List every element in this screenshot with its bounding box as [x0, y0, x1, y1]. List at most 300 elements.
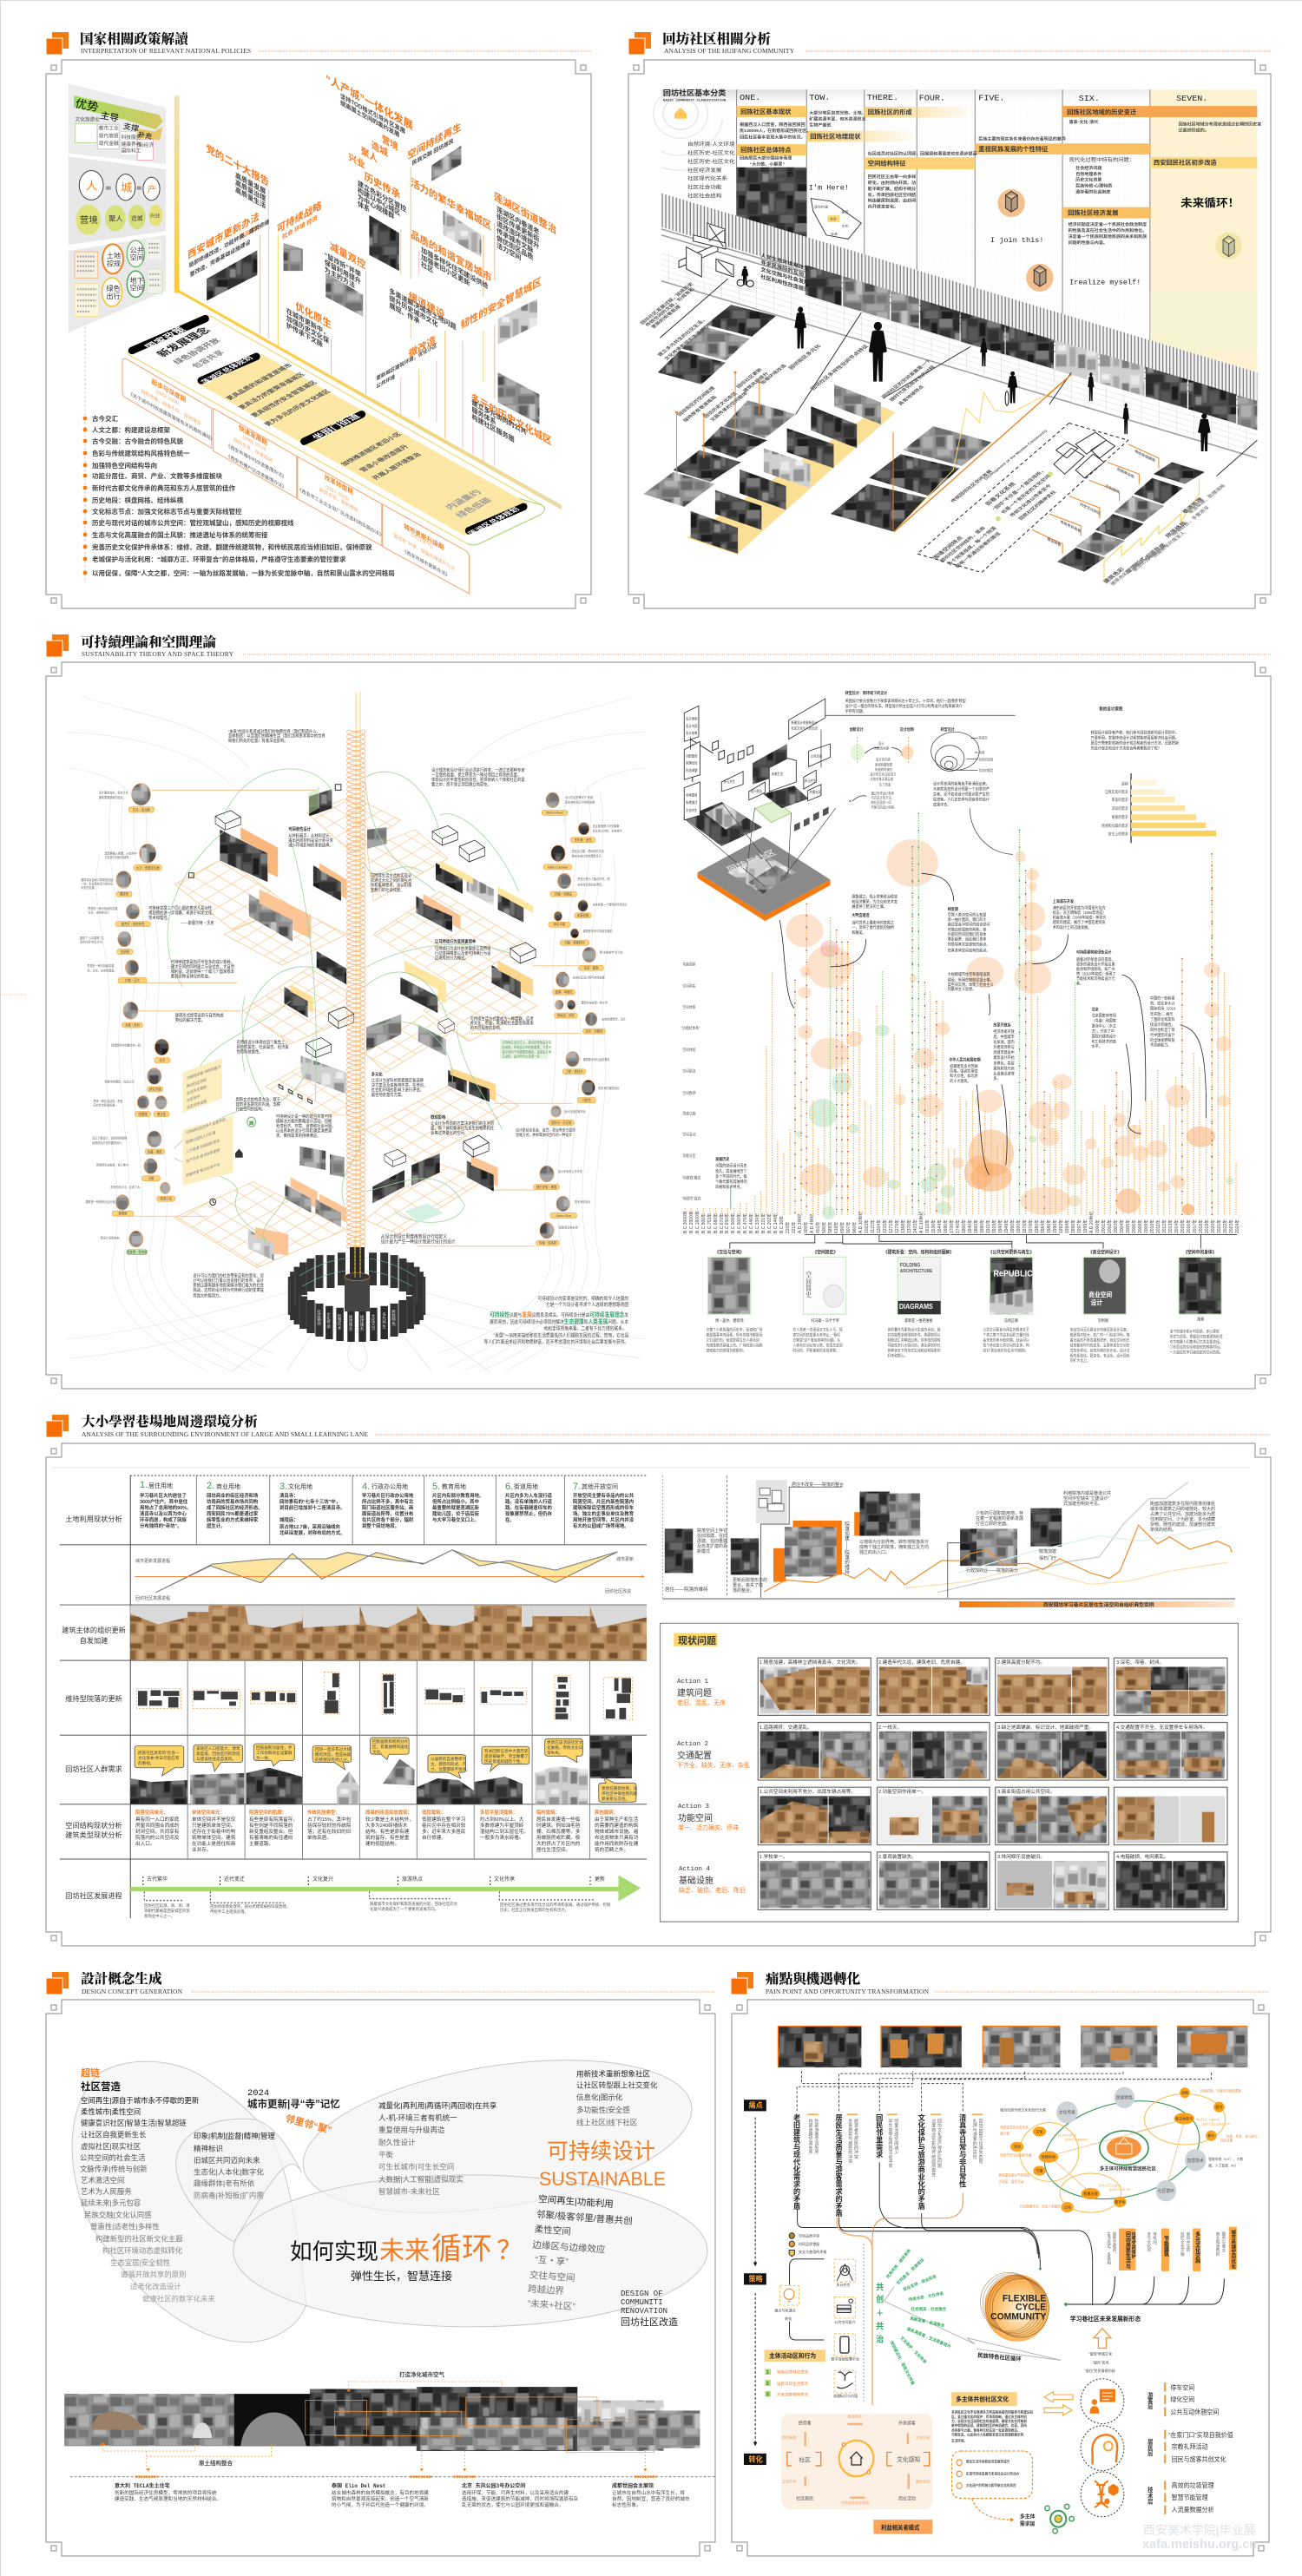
speech bubble text: 回坊一直没有过大规 [315, 1746, 352, 1752]
problems headings: 现状问题 [678, 1634, 716, 1646]
case study captions: 成都世园会主展馆 [612, 2482, 654, 2489]
building type columns: 在功能上是居住和商 [192, 1840, 236, 1847]
diagram text in place: 外部游客交流失序 [813, 2118, 819, 2156]
building type columns: 混结构二到五层住宅。 [480, 1828, 529, 1835]
rotated keyword list: 柔性空间 [534, 2224, 571, 2238]
diagram text in place: 空间激活→资源增加 [895, 2257, 925, 2286]
book titles: 托马斯・马卡卡罗 [812, 1318, 839, 1324]
portraits left [115, 784, 170, 1247]
year labels: 1860年 [973, 1219, 979, 1233]
isometric floor text: 街巷文化系统 [983, 481, 1017, 507]
history annotations: 化加速。国内 [993, 1039, 1015, 1045]
land use columns: 路。没有单独的人行道 [505, 1498, 553, 1505]
isometric floor text: 民族商业街 [1117, 466, 1134, 480]
case annotations: 改建。在旧重建 [697, 1538, 727, 1544]
3D site model: 共建社区 [810, 790, 821, 794]
floor text: 绿色协调开放 [171, 337, 223, 365]
isometric floor text [638, 252, 1227, 587]
problem captions: 4.交通配置不齐全、无设置停车专用场所。 [1116, 1724, 1207, 1731]
pale yellow tables [182, 1039, 552, 1186]
hollow arrows [1044, 2392, 1073, 2415]
isometric floor text: 回坊街区多元化 [787, 343, 823, 371]
isometric body text: 提升历史城市文化 [389, 293, 438, 329]
year labels: 1368年 [900, 1219, 906, 1233]
isometric floor text: 保持原有巷道格局 [681, 394, 719, 424]
isometric body text: “留改拆”并举 [325, 250, 361, 279]
diagram text in place: 共地业态文化服务 [841, 2500, 869, 2505]
person names and quotes: 汉娜 [148, 1176, 155, 1180]
3D site model: 文化共生 [686, 808, 698, 812]
timeline labels [144, 1876, 611, 1919]
timeline labels: 回坊社区通过更多现代化文化的传承和发展。通过保护传统、挖掘 [500, 1902, 611, 1908]
3D site model: 多元共生 [805, 779, 817, 783]
left analysis cards: 出行 [106, 292, 121, 300]
transformation text: 包容 [979, 750, 985, 755]
transformation text: 通过合作设计和参 [871, 791, 894, 795]
wall text: 民族传统-心理特质 [1075, 183, 1112, 188]
diagram text in place: 传统传承 [1042, 2153, 1055, 2159]
diagram text in place: 新旧共生的 [1186, 2231, 1191, 2253]
wall text: 重视民族发展的个性特征 [978, 145, 1048, 153]
3D site model: 未来生活 [772, 772, 783, 776]
year labels: 2013年 [1167, 1219, 1174, 1233]
floor text [142, 325, 522, 536]
diagram text in place: 社区居民 [796, 2495, 813, 2502]
land use columns: 回坊商业的街区经济和场 [207, 1492, 259, 1499]
isometric floor text: 回坊街区的空间肌理 [675, 385, 717, 417]
history annotations: 塔（2010年完成）采用了 [1076, 970, 1115, 977]
diagram text in place: 社区循环 [1158, 2188, 1174, 2194]
book titles: 《商业空间设计》 [1088, 1248, 1121, 1256]
year labels: 1023年 [864, 1219, 870, 1233]
history annotations: 方），代表了中 [1092, 1028, 1115, 1035]
pale green patch [404, 1203, 444, 1222]
stage panel text: (2017-2020) [326, 484, 349, 503]
case study captions: 泰国 Elio Del Nest [332, 2482, 386, 2489]
diagram text in place: 营造富有烟火气的街区 [998, 2173, 1030, 2178]
concept lists: 可生长城市|可生长空间 [378, 2163, 454, 2172]
theory text blocks: 会等这类量化的空间。 [431, 1130, 468, 1136]
ribbon chart labels: 城市更新 [616, 1556, 634, 1562]
theory text blocks: 建大空间的同时建之与全社会，大自然 [171, 963, 234, 970]
isometric floor text: 回坊社区的空间发展是一个 [880, 358, 933, 399]
diagram text in place: 共 [876, 2321, 884, 2330]
3D site model: 设计内容 [686, 724, 698, 728]
photo band [64, 2387, 700, 2451]
heading: Huifang community: 回坊社区相關分析 [662, 30, 771, 47]
frame [732, 2000, 1269, 2556]
history annotations: 发展历史 [715, 1156, 730, 1162]
history annotations: 的集体主义思想。 [948, 986, 976, 992]
problems headings: 功能空间 [678, 1812, 713, 1824]
ring labels: 社区循环 [317, 1309, 321, 1327]
wall text: 根据西汉人口普查，陕西省回族回 [740, 122, 806, 128]
isometric floor text: 建筑色彩文化性强，以灰为 [1108, 545, 1161, 587]
wall text: 转化，由封闭向开放。功 [868, 180, 916, 186]
building type columns: 建的低层结构。 [365, 1840, 399, 1847]
problems headings: 不齐全、缺失、无序、杂乱 [677, 1761, 750, 1769]
3D site model: 社区文化与人的互动 [792, 726, 818, 731]
history annotations: 相变期 [948, 906, 959, 912]
isometric floor text: 居住街巷 [1047, 536, 1062, 549]
book descriptions: 人类有空间认知以来。答案总是到 [792, 1342, 843, 1348]
callout: bottom right statement: 展而来的，因此可持续设计必须同时解决生态健康和人类发展问题。从本 [490, 1318, 628, 1325]
transformation text: 乎所有问题。 [845, 708, 866, 714]
book titles: 《公共空间更新与再生》 [989, 1248, 1034, 1256]
left analysis cards: 新经济 [139, 141, 154, 148]
land use columns: 文化用地 [288, 1482, 312, 1490]
book descriptions: 可能性进行大胆风险。满足建筑师在 [887, 1342, 941, 1348]
transformation text: 转型设计 [941, 726, 955, 733]
year labels: 2012年 [1161, 1219, 1167, 1233]
courtyard footprints [138, 1673, 631, 1719]
concept lists: 健康社区的数字化未来 [142, 2294, 215, 2303]
building type columns: 院落内的公共空间及 [135, 1834, 180, 1841]
timeline labels: 历史。社区正在焕发出新的生机和活力。 [500, 1907, 569, 1913]
portrait quotes: 建筑要融入周围，从自然中 [104, 851, 137, 855]
speech bubbles [135, 1738, 636, 1802]
year labels: B.C.446年 [748, 1213, 754, 1233]
history annotations: 到城市建设中 [993, 1049, 1015, 1055]
diagram text in place: 多主体可持续智慧回民社区 [1100, 2165, 1156, 2172]
building type columns: 筑的范畴之外。 [595, 1846, 628, 1853]
case annotations: 或单体建筑之间的缝隙处。较大的 [1150, 1506, 1215, 1512]
book descriptions: 在哪里”这个看似简单的问题。从 [792, 1337, 840, 1343]
grid cut lines [660, 279, 1257, 476]
theory text blocks: 可持续行为设计的关键是让可持续 [435, 945, 491, 952]
pale yellow tables: 形成的。环境设计中的各要素，只是对 [502, 1045, 552, 1049]
person names and quotes: 隈研吾 [120, 891, 128, 897]
year labels: 221年 [791, 1222, 797, 1233]
diagram text in place: 离散发展→资源融合 [910, 2315, 945, 2329]
bullet list: strategies: 生态与文化高度融合的国土风貌：推进遗址与体系的统筹衔接 [92, 530, 268, 539]
year labels: 2004年 [1119, 1219, 1125, 1233]
building type columns: 多。近年来大多居民 [422, 1828, 466, 1835]
bullet list: strategies: 文化标志节点：加强文化标志节点与重要天际线管控 [92, 507, 242, 516]
flexible community circle [981, 2272, 1049, 2342]
transformation text: 新结构重新塑 [875, 762, 893, 766]
diagram text in place: 转化 [748, 2454, 763, 2463]
orange isometric headings [187, 71, 556, 448]
year labels: B.C.1600年 [694, 1211, 700, 1233]
book descriptions: 商业空间无论建设计内容还是设计深度。 [1070, 1326, 1130, 1331]
case study captions: 意大利 TECLA生土住宅 [115, 2482, 170, 2489]
diagram text in place: 商业和消费的 [1215, 2231, 1220, 2257]
theory text blocks: 都到这种全球化的和益。 [171, 973, 212, 980]
land use columns: 在。 [505, 1516, 515, 1523]
land use columns: 教育用地 [442, 1482, 466, 1490]
hierarchy bar chart: 审美的需求 [1112, 797, 1128, 802]
diagram text in place: 回坊居民生活与 [1125, 2231, 1130, 2270]
isometric floor text: 人文生态环境难改变 [760, 252, 809, 273]
isometric body text: 为主的方法 [325, 265, 355, 290]
ribbon chart labels [135, 1556, 634, 1601]
isometric floor text: 建立多元共生的社区生活， [656, 316, 708, 358]
bullet list: strategies: 新时代古都文化传承的典范和东方人居营筑的佳作 [92, 483, 235, 492]
theory text blocks: 可持续建筑是指尽可皆多的减少能耗。 [171, 959, 234, 965]
problems headings: Action 1 [677, 1679, 709, 1686]
diagram text in place: 参与 [1207, 2132, 1214, 2138]
left side icons [780, 2233, 864, 2402]
case annotations: 及自发扩建的更 [697, 1543, 727, 1549]
problems headings: 基础设施 [679, 1875, 713, 1886]
land use columns: 城隍庙： [279, 1516, 299, 1523]
year labels: 2021年 [1216, 1219, 1222, 1233]
portrait quotes: 未来的是一个建筑的环境设计 [593, 902, 628, 907]
portrait quotes: 是未来的社区可持续发展 [565, 799, 595, 805]
problem captions: 3.休闲娱乐设施破旧。 [997, 1853, 1045, 1860]
year labels: 1978年 [1028, 1219, 1034, 1233]
heading: pain points: 痛點與機遇轉化 [766, 1970, 861, 1987]
history annotations: 其空间实用，体现了社会主义 [948, 981, 994, 988]
case annotations: 空间中空缺失“立建设计” [1063, 1495, 1110, 1502]
diagram text in place: 多元文化交融 [1194, 2231, 1200, 2264]
diagram text in place: 生活品位，多是相 [1107, 2231, 1112, 2265]
stage panel text: 目标改善、政策引导、规划落实 [141, 387, 201, 428]
history annotations: 当时世界上最宏伟的宫殿之 [852, 919, 895, 926]
history annotations: 改革开放后 [993, 1022, 1011, 1028]
diagram text in place: 清真寺日常与非日常性 [958, 2113, 967, 2187]
building type columns: 简易的砖混民居建筑： [365, 1809, 412, 1816]
speech bubble text: 该地区人口密度大，建筑 [196, 1745, 240, 1751]
diagram text in place: 数字化 [1115, 2198, 1125, 2204]
isometric floor text: 寻求民族际的互动 [760, 259, 804, 278]
year labels: B.C.509年 [730, 1213, 736, 1233]
panel: design concept generation [46, 1970, 715, 2556]
year labels: 1960年 [1016, 1219, 1022, 1233]
theory text blocks: “未来”的设计和造成对我们的物质世界（我们制造什么， [228, 728, 320, 735]
theory text blocks: 计可以给我们力量以创造我们的世界，设计 [193, 1278, 264, 1284]
bullet list: strategies: 老城保护与活化利用：“城廓方正、环带复合”的总体格局，严格遵守生态要素的管控要求 [92, 555, 346, 563]
isometric floor text: 建筑风貌提升 [741, 371, 771, 393]
heading: sustainability theory: SUSTAINABILITY THEORY AND SPACE THEORY [82, 650, 234, 658]
portrait quotes: 方式。未来的设计 [88, 910, 110, 914]
wall text: 经济问题度决定着一个民族社会政治制度 [1069, 221, 1147, 227]
wall text: 社会经济问题 [1075, 165, 1102, 171]
diagram text in place: 痛点与机遇点 [774, 2307, 796, 2313]
transformation text: 多层次 [979, 735, 988, 740]
wall text: “大分散、大聚居” [761, 168, 797, 173]
history annotations: 和精美。 [852, 930, 866, 936]
speech bubble text: 渐失失。 [547, 1750, 562, 1756]
theory text blocks: 供强大的驱动力。 [193, 1292, 223, 1299]
building type columns: 居住生活空间。 [536, 1846, 570, 1853]
theory text blocks: 设计理念和设计师行业必须进行转变。一改过去那种专家 [431, 767, 525, 773]
diagram text in place: 多创社区文化不仅强调多方利益相关者的积极参与和建设社 [951, 2410, 1033, 2415]
history annotations: 中国的一些新建 [1150, 995, 1175, 1002]
case annotations: 院落加建 [1039, 1548, 1056, 1554]
year labels: 1403年 [912, 1219, 918, 1233]
building type columns: 只是建筑单体空间。 [192, 1822, 235, 1829]
year labels: 960年 [852, 1222, 858, 1233]
rotated keyword list: 空间再生|功能利用 [538, 2193, 614, 2210]
wall text: 社区经济发展 [687, 166, 721, 174]
history annotations: 了国际化和高科 [1150, 1015, 1175, 1022]
isometric body text: 保留利用提升 [325, 257, 361, 286]
person names and quotes: 马斯克 [582, 1098, 591, 1102]
diagram text in place: 邻里活动空间减少 [893, 2118, 898, 2155]
heading: design concept: DESIGN CONCEPT GENERATION [82, 1988, 183, 1995]
case annotations: 利用院落内或是巷道公共 [1063, 1490, 1111, 1496]
wall text: 空间结构特征 [868, 160, 906, 167]
building type columns: 临时建筑： [536, 1809, 560, 1816]
land use columns: 学习巷片区行政办公用地 [362, 1492, 414, 1499]
transformation text: 设计”这一理念的领头羊。转型设计的主旨是人们可以利用设计过程来解决介 [845, 703, 963, 709]
problem cell frames [758, 1658, 1227, 1909]
person names and quotes: 李尔森・迪克 [575, 838, 592, 842]
year labels: B.C.144年 [773, 1213, 779, 1233]
book titles: 《交往与空间》 [715, 1248, 744, 1256]
diagram text in place: 传统业态→文化传承 [908, 2290, 944, 2303]
book descriptions: 并功能需求和限制条件。将建筑师从 [887, 1331, 941, 1337]
row labels: 回坊社区发展进程 [65, 1891, 122, 1900]
year labels: B.C.221年 [760, 1213, 766, 1233]
problem captions: 4.电箱破损、电网紊乱。 [1116, 1853, 1169, 1860]
heading: Huifang community: ANALYSIS OF THE HUIFANG COMMUNITY [664, 47, 795, 55]
history annotations: 外建筑师参与 [993, 1044, 1015, 1050]
concept lists: 文脉传承|传统与创新 [80, 2165, 148, 2173]
building type columns: 较少数是土木结构外， [365, 1816, 414, 1823]
diagram text in place: 社区数据平台、社区人员服务 [1020, 2204, 1061, 2209]
bullet list: strategies: 古今交融：古今融合的特色风貌 [92, 437, 183, 445]
floor text: 绿色低碳 [453, 496, 495, 519]
case annotations: 在旧加建。在旧 [697, 1533, 727, 1539]
isometric body text: 构建以中心城区 [358, 185, 400, 217]
wall text: 民130009人，在街巷形成回民社区。 [740, 128, 811, 134]
year labels: 2014年 [1174, 1219, 1180, 1233]
year labels: 2015年 [1180, 1219, 1186, 1233]
building type columns: 具有同一入口的家庭 [135, 1816, 180, 1823]
year labels: 500年 [821, 1222, 827, 1233]
land use columns: 在片区的各个部分，辐射 [362, 1516, 414, 1523]
y axis labels: 功能分区 [682, 1153, 696, 1158]
person names and quotes: 比尔・邓斯特 [585, 1028, 603, 1034]
timeline labels: 化复兴逐渐成为了一个重要的发展方向。 [370, 1906, 438, 1912]
isometric street diagram [638, 89, 1261, 587]
theory text blocks: 最佳地走基优方案。 [372, 1092, 404, 1098]
timeline labels: 文化复兴 [312, 1876, 333, 1883]
year labels: 1840年 [967, 1219, 973, 1233]
transformation text: 设计师文化决定的方 [870, 772, 897, 776]
theory text blocks: 可持续设计是一种的建且并发可持 [276, 1114, 332, 1120]
year labels: 2017年 [1192, 1219, 1198, 1233]
left analysis cards: 控规 [107, 260, 121, 268]
year labels [682, 1211, 1240, 1233]
history annotations: 经济改革开放 [993, 1028, 1015, 1035]
person names and quotes: 托马・皮克斯 [133, 807, 150, 812]
year labels: 1204年 [876, 1219, 882, 1233]
orange isometric headings: 多元的历史文化城区 [471, 391, 552, 448]
year labels: 1994年 [1064, 1219, 1070, 1233]
diagram text in place: 文化传承 [1059, 2110, 1075, 2116]
headline: future cycle question [290, 2232, 523, 2283]
year labels: 1800年 [961, 1219, 967, 1233]
theory text blocks [148, 728, 575, 1299]
floor text: 新发展理念 [154, 325, 214, 358]
y axis labels: 空间互动 [682, 1131, 696, 1137]
table grid [60, 1475, 647, 1918]
book descriptions: 公共空间更新与再生的根本在于 [983, 1326, 1029, 1331]
person names and quotes: 佐藤・雅彦 [148, 1149, 162, 1153]
bullet list: strategies: 功能分居住、商贸、产业、文教等多维度板块 [92, 471, 222, 480]
diagram text in place: 策略 [748, 2275, 763, 2284]
community renovation label: 回坊社区改造 [621, 2316, 678, 2328]
problem captions: 1.道路拥挤、交通混乱。 [760, 1724, 812, 1731]
case annotations: 街面加建建筑多在院内院落衔接处 [1150, 1501, 1215, 1507]
policy diagram [69, 71, 562, 594]
3D site model: 街巷激活 [686, 800, 698, 805]
portrait quotes: 去发现可持续的建筑。 [104, 855, 131, 859]
diagram text in place: 节事 [1036, 2167, 1043, 2173]
diagram text in place: 实现可持续发展与未来社会设计的动力 [966, 2471, 1020, 2475]
case study captions: 标志性形象。 [612, 2501, 641, 2508]
problem photos [760, 1666, 1226, 1908]
co-creation chip [951, 2392, 1017, 2406]
isometric body text: 社区 [421, 260, 433, 274]
pale yellow tables: 提高社区的人力价值 [186, 1129, 216, 1146]
orange isometric headings: 造城 [372, 139, 388, 159]
history annotations: 唐朝建立，陆上带来政治稳定 [852, 893, 898, 899]
person names and quotes: 伊纳吉・阿尔 [557, 1013, 575, 1017]
isometric body text: 建立色彩分区管控 [358, 179, 406, 214]
bullet list: strategies: 历史与现代对话的城市公共空间：管控观城望山，感知历史的视廊视线 [92, 518, 294, 527]
problem curves [798, 2162, 1224, 2405]
case annotations: 新模式 [697, 1548, 710, 1554]
rotated keyword list: “互・享” [535, 2254, 569, 2268]
floor text: 国家政策 [142, 325, 189, 351]
timeline labels: 旅游热点 [402, 1876, 423, 1883]
orange isometric headings: 历史传承 [365, 170, 400, 202]
transformation text: 促进者。人们正在参与到自身的设计 [933, 796, 990, 803]
speech bubble text: 遗迹被破坏，完全颠覆了 [484, 1753, 529, 1759]
isometric floor text: 建筑色彩 [1101, 566, 1127, 584]
stage panel text: 快速发展期 [239, 423, 267, 447]
diagram text in place: Intelligent [1098, 2184, 1122, 2189]
theory text blocks: 怎样制造）以及我们的精神生活（我们怎样思考其中的世界 [228, 733, 326, 739]
year labels: 2023年 [1228, 1219, 1234, 1233]
diagram text in place: 共 [876, 2282, 884, 2292]
concept lists: 空间再生|源自于城市永不停歇的更新 [81, 2096, 200, 2105]
theory text blocks: 提出回收材料是设计师寻求 [288, 838, 333, 844]
y axis labels: 思维功能 [682, 1110, 696, 1115]
transformation text: 英国设计委员会致力于探索该领域长达十年之久。十年间，他们一直围绕“转型 [845, 698, 966, 704]
portrait quotes: 活的共同”的设计中。 [80, 939, 105, 943]
theory text blocks: 设计是为产生一种设计而进行设计的设计 [381, 1238, 456, 1245]
orange isometric headings: 韧性的安全智慧城区 [461, 275, 542, 332]
diagram text in place: 人流量数据分析 [1172, 2506, 1214, 2514]
left analysis cards: 现代金融 [99, 140, 119, 147]
pale yellow tables: 社区共享设施 [187, 1098, 207, 1111]
axis bars [730, 1235, 1237, 1249]
diagram text in place: 时间品质错配 [799, 2241, 819, 2246]
diagram text in place: 绿化空间 [1170, 2395, 1194, 2403]
left analysis cards: 现代商贸 [99, 132, 119, 139]
heading: pain points [731, 1970, 1269, 1995]
year labels: 2018年 [1198, 1219, 1204, 1233]
gold corner bar [174, 95, 562, 510]
year labels: 2000年 [1095, 1219, 1101, 1233]
history annotations: 尽管人类对空间的认知是 [948, 911, 987, 918]
person names and quotes: 伊东丰雄 [554, 922, 565, 927]
history annotations: 和经济繁荣，为文化和艺术发 [852, 898, 898, 904]
case annotations: 院落空间上存在 [697, 1528, 727, 1534]
floor plane [128, 315, 545, 545]
building type columns: 括保存较好的传统院 [307, 1822, 352, 1829]
wall text: 社区成员对社区的认同感，回属感和满意度也在逐步提高 [868, 151, 977, 156]
land use columns: 清真寺以及以其为中心 [140, 1510, 187, 1517]
small icons [188, 785, 341, 1206]
theory text blocks: 用新文式的构造方法。赋于 [236, 1096, 280, 1103]
